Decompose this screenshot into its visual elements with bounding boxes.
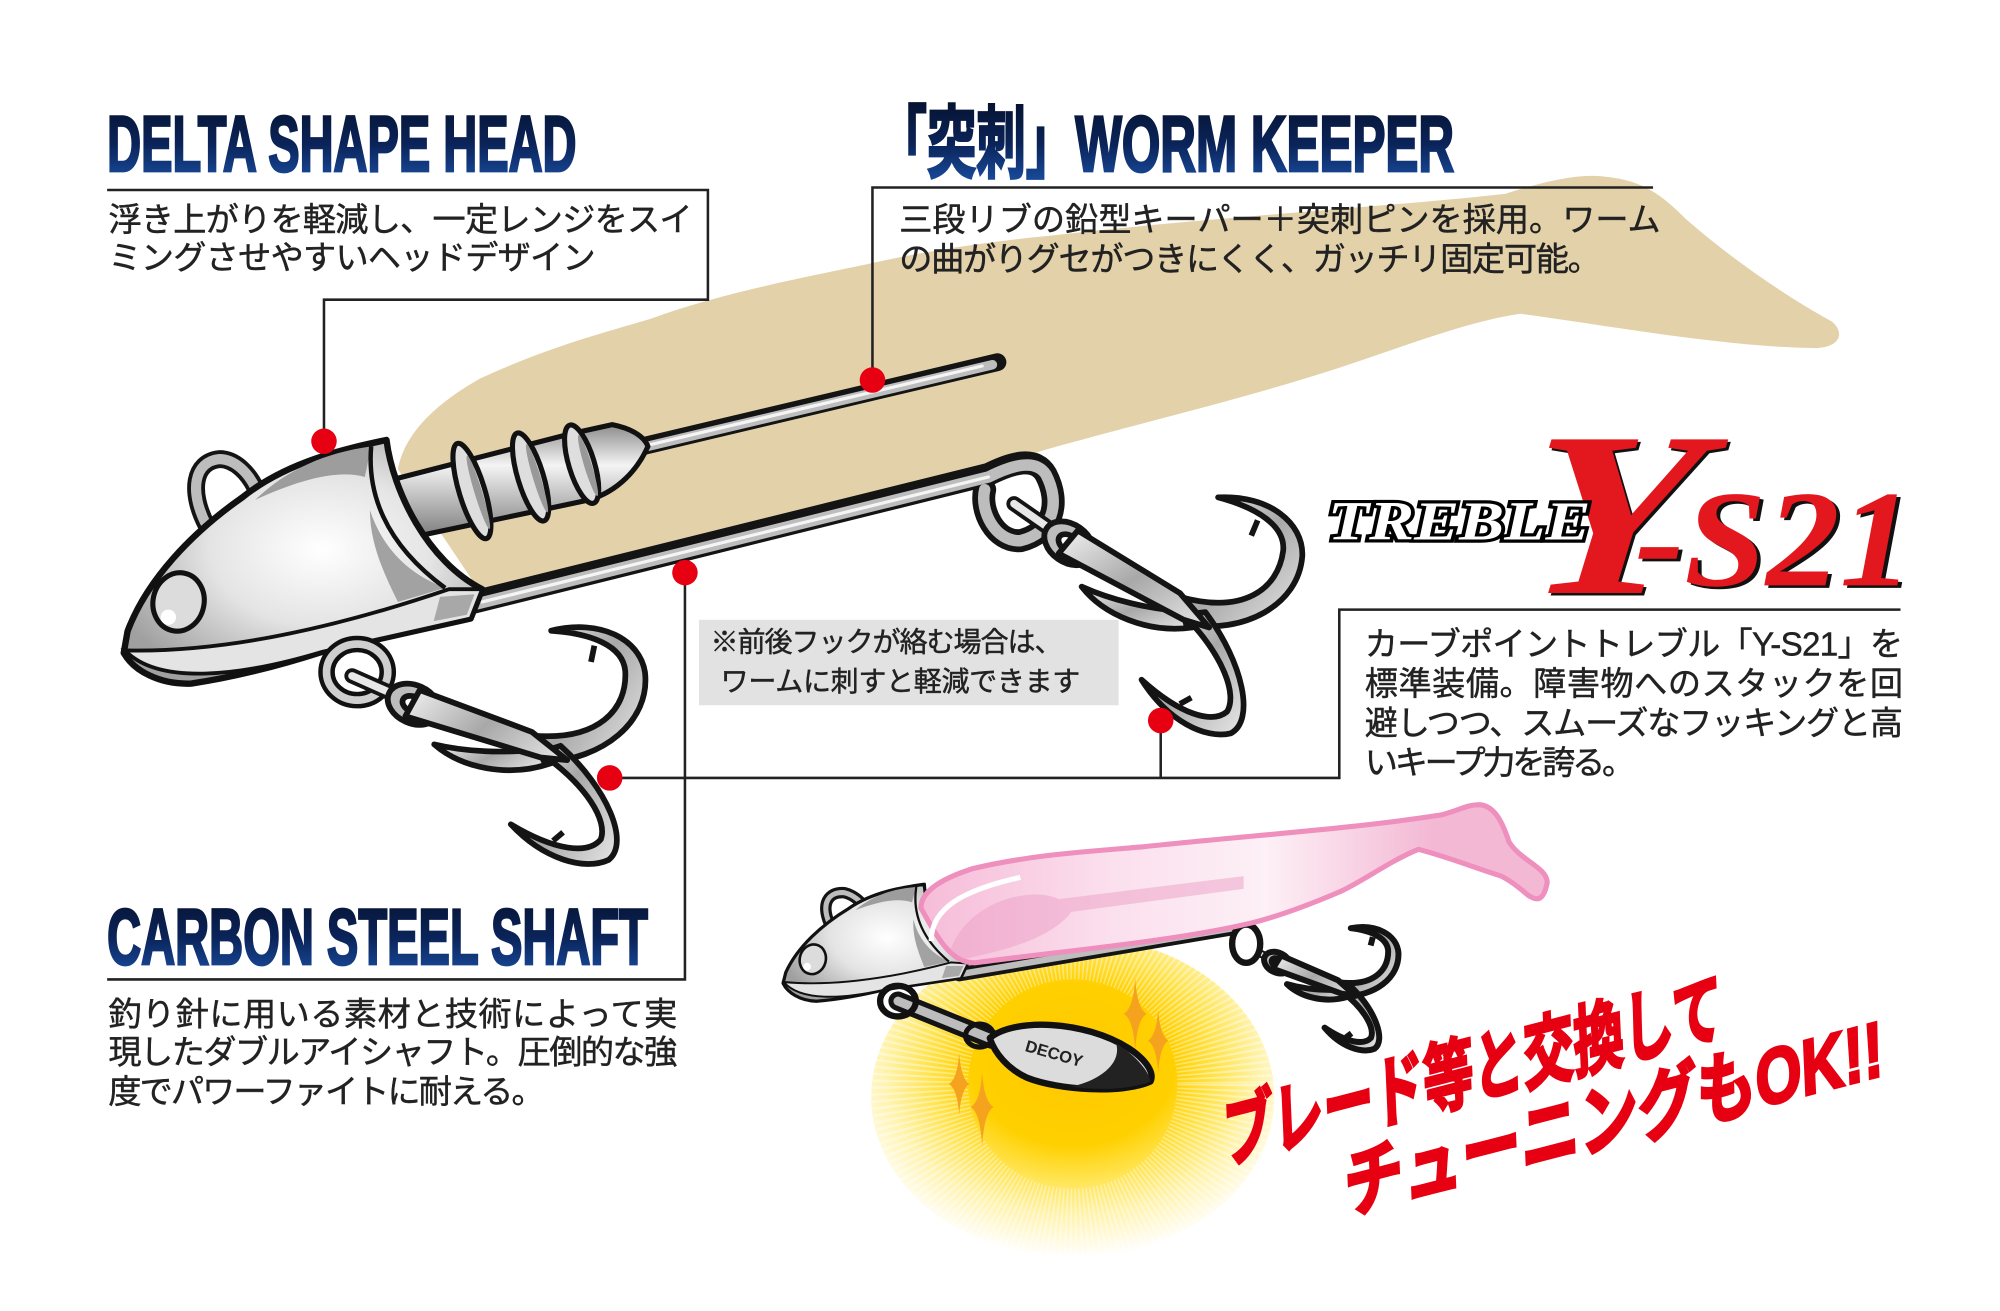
description: 三段リブの鉛型キーパー＋突刺ピンを採用。ワーム	[899, 202, 1661, 239]
red marker dots	[311, 367, 1173, 791]
panel: Y-S21 hook description	[610, 610, 1903, 782]
description: 避しつつ、スムーズなフッキングと高	[1365, 706, 1903, 743]
logo: treble Y-S21	[1328, 384, 1917, 646]
front treble hook	[351, 614, 679, 902]
heading: DELTA SHAPE HEAD	[107, 99, 577, 188]
description: いキープ力を誇る。	[1365, 745, 1635, 782]
keeper lead body with three ribs	[393, 421, 648, 542]
leader lines	[610, 610, 1901, 778]
jig head and hardware illustration	[124, 362, 1302, 902]
leader line	[107, 573, 685, 979]
rear shaft with bend and eye	[474, 463, 1053, 604]
panel: worm keeper	[872, 99, 1661, 380]
logo: treble Y-S21: TREBLE	[1328, 490, 1591, 551]
description: 浮き上がりを軽減し、一定レンジをスイ	[108, 202, 693, 239]
description: の曲がりグセがつきにくく、ガッチリ固定可能。	[899, 241, 1601, 278]
small line eye	[826, 893, 867, 928]
small rear hook	[1246, 922, 1411, 1065]
swivel	[880, 986, 994, 1047]
blade: DECOY	[1023, 1036, 1085, 1071]
front ring	[327, 644, 388, 700]
worm silhouette	[398, 176, 1839, 593]
keeper pin	[631, 362, 997, 450]
rear treble hook	[1014, 497, 1302, 734]
note box: ※前後フックが絡む場合は、	[710, 627, 1063, 658]
panel: carbon steel shaft	[107, 573, 685, 1111]
small head	[782, 875, 973, 1012]
logo: treble Y-S21: Y	[1484, 384, 1750, 644]
logo: treble Y-S21: -S21	[1635, 462, 1913, 615]
line eye	[196, 459, 255, 525]
callout: red slanted text	[1221, 964, 1885, 1231]
description: 標準装備。障害物へのスタックを回	[1365, 666, 1903, 703]
description: カーブポイントトレブル「Y-S21」を	[1365, 627, 1903, 663]
description: 度でパワーファイトに耐える。	[108, 1074, 545, 1111]
note box: ワームに刺すと軽減できます	[721, 666, 1080, 697]
leader line	[872, 187, 1653, 380]
panel: delta shape head	[107, 99, 708, 441]
heading: 「突刺」WORM KEEPER	[878, 99, 1454, 188]
logo: treble Y-S21: -S21	[1639, 465, 1917, 618]
small shaft	[959, 927, 1240, 974]
yellow glow burst	[871, 931, 1274, 1257]
sparkles	[949, 978, 1168, 1146]
description: ミングさせやすいヘッドデザイン	[108, 240, 596, 277]
small lure with pink worm	[782, 805, 1547, 1089]
heading: CARBON STEEL SHAFT	[107, 892, 648, 981]
logo: treble Y-S21: Y	[1487, 386, 1753, 646]
small hook eye ring	[1232, 925, 1260, 963]
delta head	[124, 440, 482, 684]
callout: red slanted text: ブレード等と交換して	[1221, 964, 1724, 1180]
leader line	[107, 190, 708, 441]
description: 釣り針に用いる素材と技術によって実	[108, 996, 677, 1033]
description: 現したダブルアイシャフト。圧倒的な強	[108, 1035, 677, 1072]
pink worm	[921, 805, 1547, 963]
blade	[990, 1025, 1152, 1089]
note box	[699, 620, 1119, 705]
